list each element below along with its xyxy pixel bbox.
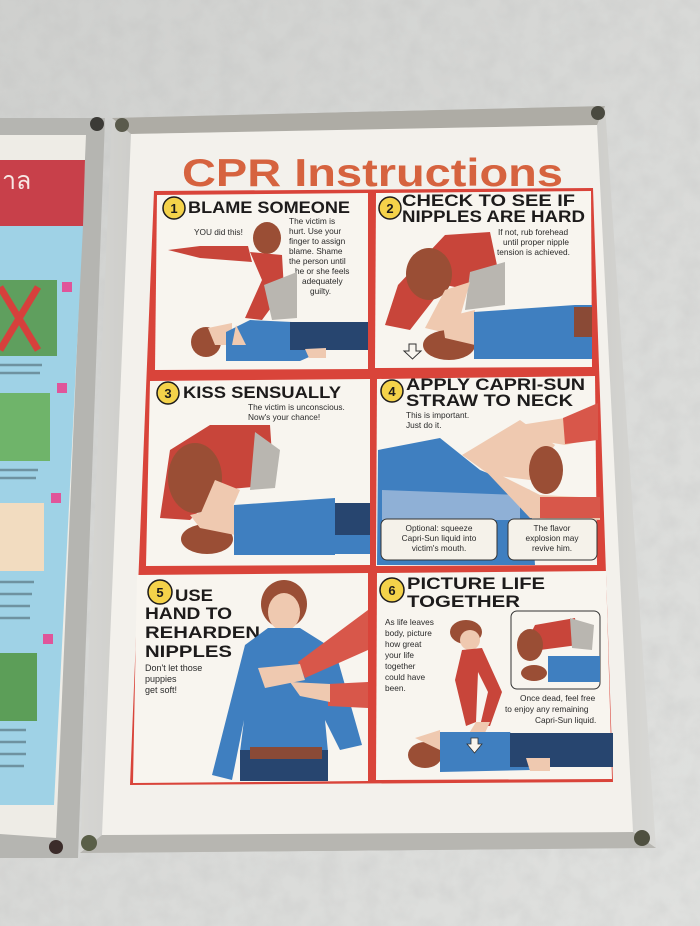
figure: victim close-up (377, 403, 600, 565)
panel 5 (133, 573, 368, 783)
body text 5: get soft! (145, 685, 177, 695)
figure: victim 2 (423, 305, 592, 360)
heading 3: KISS SENSUALLY (183, 383, 342, 402)
body text 5 (145, 663, 202, 695)
figure: victim upright (212, 580, 362, 781)
caption (505, 693, 596, 725)
callout right: revive him. (532, 543, 572, 553)
body text 6 (385, 617, 434, 693)
number 5 badge: 5 (156, 585, 164, 600)
number 4 badge: 4 (388, 384, 396, 399)
heading 2 (402, 191, 585, 226)
heading 4: APPLY CAPRI-SUN (406, 375, 585, 394)
heading 5: HAND TO (145, 604, 232, 623)
main poster frame (80, 106, 656, 853)
figure: standing blamer (168, 222, 297, 320)
heading 2: NIPPLES ARE HARD (402, 207, 585, 226)
figure: rescuer bending (385, 232, 505, 335)
body text 6: your life (385, 650, 414, 660)
number 3 badge (157, 382, 179, 404)
body text 2: If not, rub forehead (498, 227, 568, 237)
callout right: The flavor (534, 523, 571, 533)
panel 1 (155, 193, 368, 370)
number 2 badge (379, 197, 401, 219)
body text 6: As life leaves (385, 617, 434, 627)
body text 4: This is important. (406, 410, 469, 420)
heading 4 (406, 375, 585, 410)
panel 2 (375, 191, 592, 368)
body text 6: could have (385, 672, 426, 682)
arrow (404, 344, 421, 359)
body text 2: until proper nipple (503, 237, 569, 247)
panel 3 (146, 379, 370, 566)
body text 1: hurt. Use your (289, 226, 341, 236)
heading 6: PICTURE LIFE (407, 574, 545, 593)
number 6 badge (380, 578, 404, 602)
heading 5: REHARDEN (145, 623, 260, 642)
body text 4: Just do it. (406, 420, 442, 430)
figure: lying victim (191, 320, 368, 361)
heading 6: TOGETHER (407, 592, 520, 611)
body text 6: body, picture (385, 628, 432, 638)
number 5 badge (148, 580, 172, 604)
figure: rescuer kissing (160, 425, 280, 525)
number 4 badge (381, 380, 403, 402)
arrow down (467, 738, 482, 753)
heading 4: STRAW TO NECK (406, 391, 574, 410)
inset illustration (511, 611, 600, 689)
caption: Once dead, feel free (520, 693, 596, 703)
panel 4 (376, 375, 600, 566)
callout left (381, 519, 497, 560)
heading 2: CHECK TO SEE IF (402, 191, 575, 210)
body text 4 (406, 410, 469, 430)
left poster heading: าล (2, 167, 31, 195)
body text 1: finger to assign (289, 236, 346, 246)
title: CPR Instructions (182, 152, 563, 195)
body text 2: tension is achieved. (497, 247, 570, 257)
body text 5: puppies (145, 674, 177, 684)
number 1 badge: 1 (170, 201, 178, 216)
number 1 badge (163, 197, 185, 219)
body text 1: he or she feels (295, 266, 349, 276)
body text 1: blame. Shame (289, 246, 343, 256)
figure: victim 6 (408, 730, 613, 772)
number 2 badge: 2 (386, 201, 394, 216)
heading 5 (145, 586, 260, 661)
callout right: explosion may (525, 533, 579, 543)
heading 1: BLAME SOMEONE (188, 198, 350, 217)
body text 3 (248, 402, 345, 422)
callout right (508, 519, 597, 560)
body text 1: The victim is (289, 216, 335, 226)
speech label: YOU did this! (194, 227, 243, 237)
callout left: victim's mouth. (412, 543, 466, 553)
body text 6: been. (385, 683, 406, 693)
body text 6: together (385, 661, 416, 671)
left poster images (0, 280, 72, 766)
body text 1: adequately (302, 276, 343, 286)
figure: rescuer compressions (450, 620, 502, 735)
body text 3: The victim is unconscious. (248, 402, 345, 412)
caption: Capri-Sun liquid. (535, 715, 596, 725)
body text 3: Now's your chance! (248, 412, 320, 422)
heading 5: USE (175, 586, 213, 605)
body text 6: how great (385, 639, 422, 649)
heading 5: NIPPLES (145, 642, 232, 661)
red grid backing (130, 188, 613, 785)
body text 5: Don't let those (145, 663, 202, 673)
number 3 badge: 3 (164, 386, 172, 401)
body text 1 (289, 216, 349, 296)
left neighbouring poster (0, 117, 105, 858)
caption: to enjoy any remaining (505, 704, 589, 714)
heading 6 (407, 574, 545, 611)
callout left: Capri-Sun liquid into (402, 533, 477, 543)
panel 6 (376, 571, 613, 780)
number 6 badge: 6 (388, 583, 396, 598)
body text 1: the person until (289, 256, 346, 266)
callout left: Optional: squeeze (406, 523, 473, 533)
body text 2 (497, 227, 570, 257)
figure: helping arms (258, 610, 368, 708)
body text 1: guilty. (310, 286, 331, 296)
figure: victim 3 (181, 498, 370, 555)
